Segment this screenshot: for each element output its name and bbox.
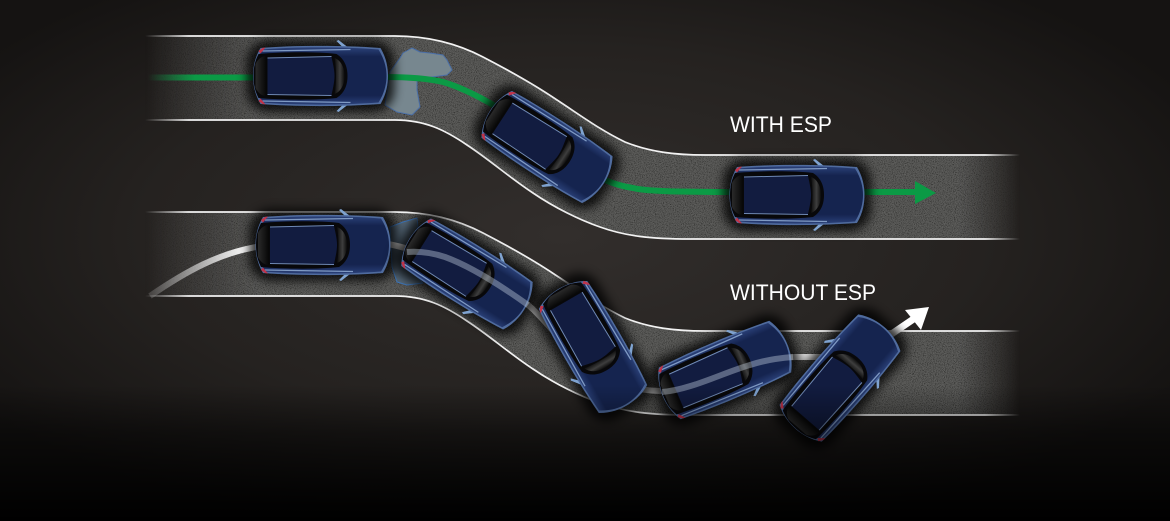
trajectory: white path without ESP — [150, 244, 825, 391]
arrow: white leaves the road — [890, 307, 929, 335]
car 3: with ESP leaving bend — [723, 159, 871, 231]
car 2: with ESP in bend — [465, 77, 629, 217]
car 8: without ESP leaving road — [764, 299, 916, 457]
car 5: without ESP starting to skid — [385, 204, 549, 344]
puddle: upper water patch — [385, 48, 452, 115]
arrow: green continues — [860, 181, 936, 204]
car 1: with ESP entering bend — [246, 40, 394, 112]
puddle: lower water patch — [390, 218, 423, 285]
ghost trail over cars — [407, 252, 793, 392]
road texture — [145, 30, 1020, 425]
label: with ESP: WITH ESP — [730, 112, 832, 137]
car 7: without ESP counter-skid — [643, 308, 807, 432]
bottom vignette — [0, 385, 1170, 521]
road edge lines — [145, 36, 1020, 415]
road: without ESP — [145, 212, 1020, 415]
label: without ESP: WITHOUT ESP — [730, 280, 876, 305]
road: with ESP — [145, 36, 1020, 239]
car 6: without ESP spinning — [525, 265, 661, 429]
car 4: without ESP entering bend — [249, 209, 397, 281]
trajectory: green path with ESP — [148, 77, 740, 192]
